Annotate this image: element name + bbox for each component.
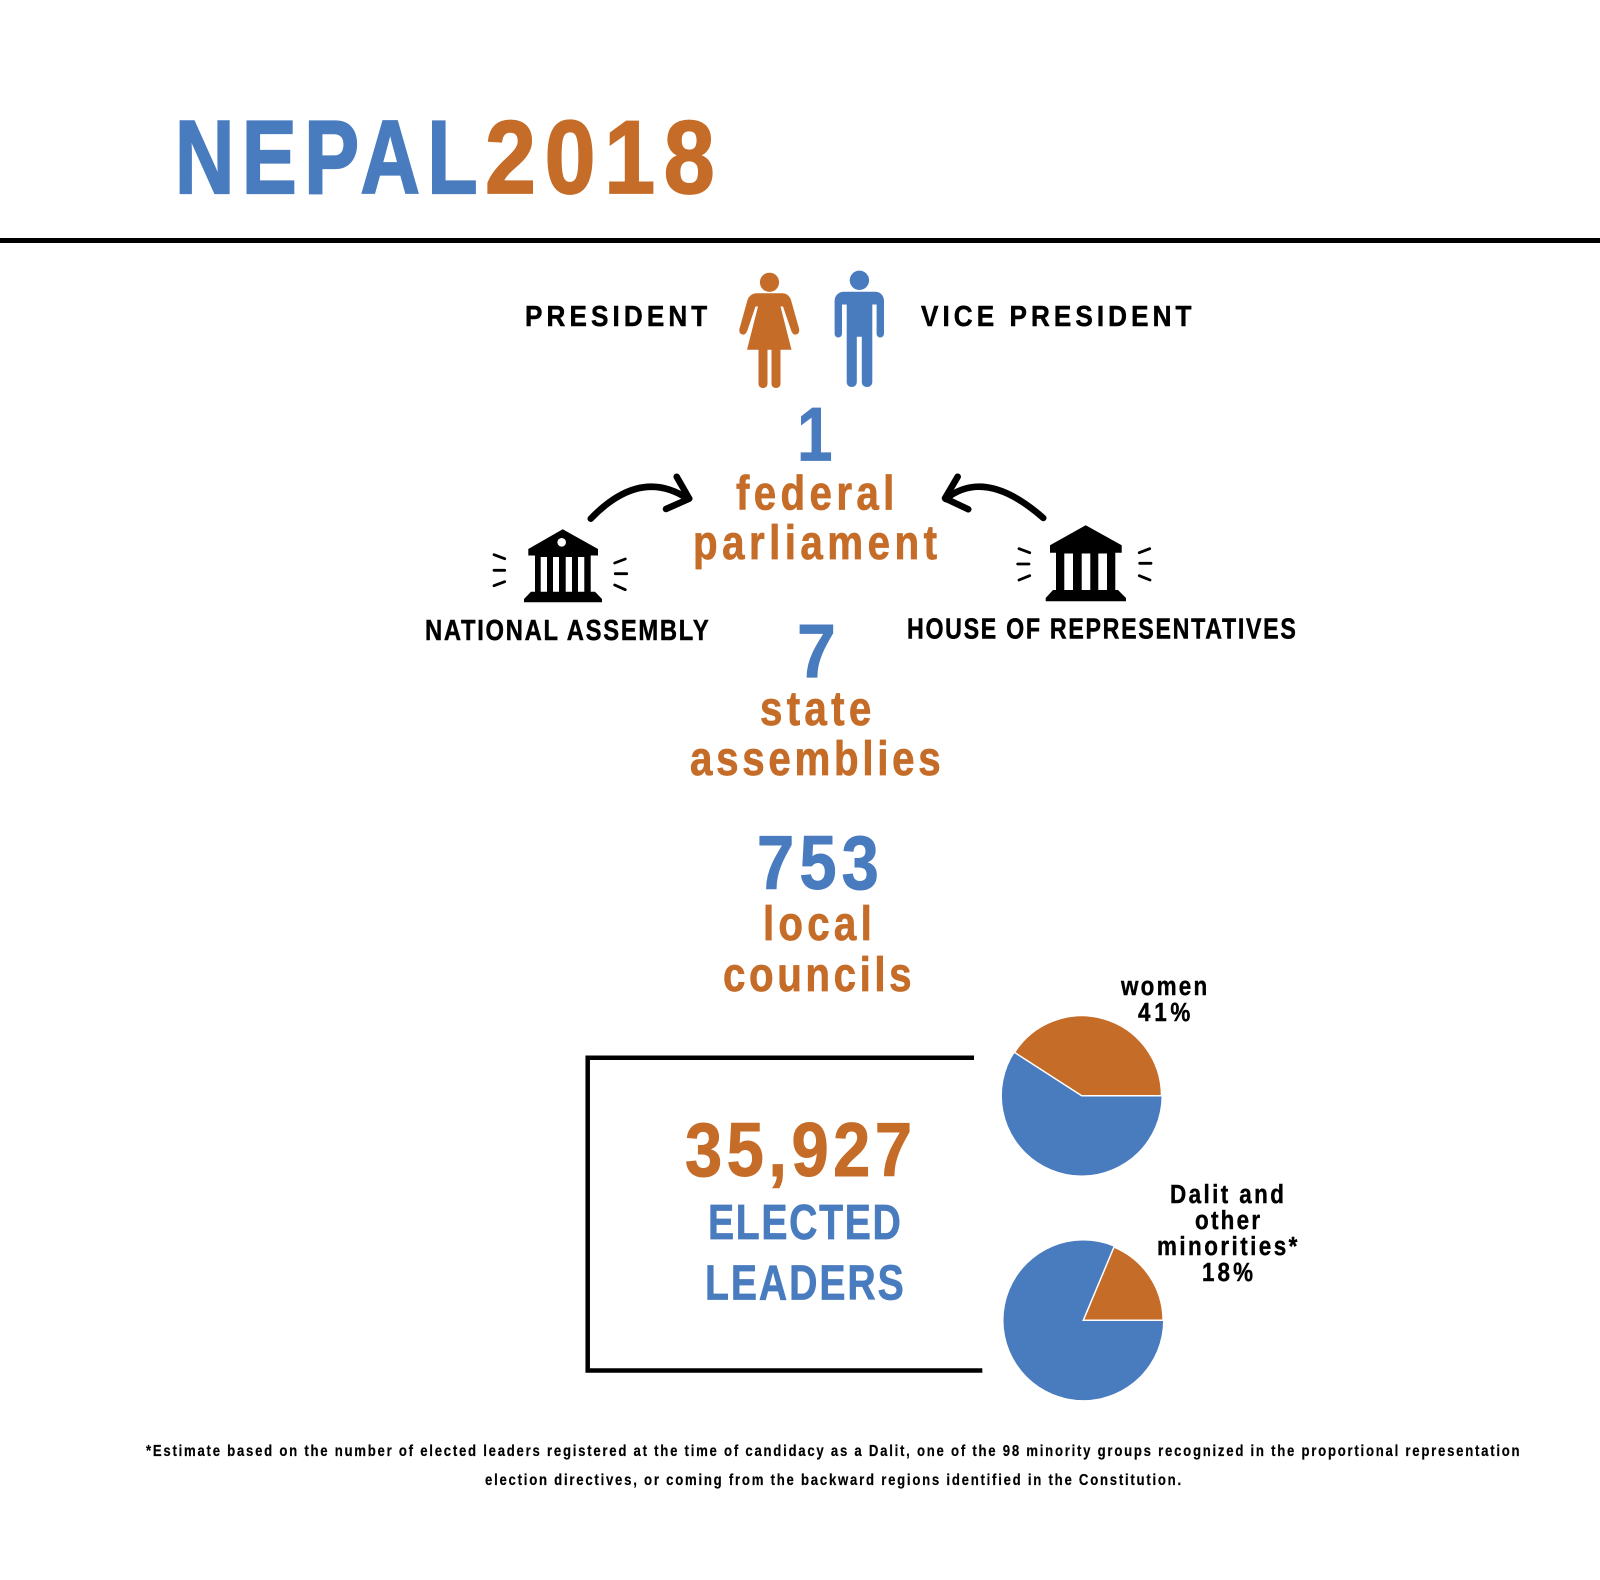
- stat: 35,927 elected leaders: [685, 1108, 912, 1310]
- stat: 1 federal parliament: federal: [736, 467, 894, 520]
- label: vice president: VICE PRESIDENT: [921, 300, 1192, 332]
- stat: 753 local councils: councils: [723, 949, 912, 1002]
- label: women 41%: women: [1120, 973, 1207, 1001]
- stat: 753 local councils: 753: [757, 821, 879, 906]
- stat: 7 state assemblies: [690, 610, 941, 786]
- label: dalit and other minorities 18%: Dalit and: [1170, 1181, 1284, 1209]
- arrow: house of representatives to parliament: [945, 477, 1043, 518]
- label: dalit and other minorities 18%: 18%: [1202, 1259, 1253, 1287]
- pie chart: women 41%: [1002, 1016, 1162, 1176]
- label: women 41%: [1120, 973, 1207, 1027]
- label: dalit and other minorities 18%: other: [1195, 1207, 1260, 1235]
- stat: 753 local councils: local: [763, 898, 872, 951]
- stat: 35,927 elected leaders: 35,927: [685, 1108, 912, 1193]
- label: dalit and other minorities 18%: [1157, 1181, 1298, 1287]
- stat: 7 state assemblies: 7: [797, 610, 836, 694]
- stat: 1 federal parliament: [693, 391, 937, 570]
- arrow: national assembly to parliament: [591, 477, 689, 519]
- icon: woman: [739, 273, 799, 388]
- icon: house of representatives building: [1018, 525, 1151, 601]
- label: women 41%: 41%: [1138, 999, 1190, 1027]
- stat: 1 federal parliament: 1: [797, 391, 833, 477]
- icon: man: [835, 271, 884, 387]
- stat: 7 state assemblies: state: [760, 683, 871, 736]
- label: dalit and other minorities 18%: minorities*: [1157, 1233, 1298, 1261]
- label: president: PRESIDENT: [525, 300, 707, 332]
- stat: 1 federal parliament: parliament: [693, 517, 937, 570]
- label: national assembly: NATIONAL ASSEMBLY: [425, 614, 709, 647]
- footnote: *Estimate based on the number of elected leaders registered at the time of candidacy as a Dalit, one of the 98 minority groups recognized in the proportional representation: [146, 1443, 1520, 1461]
- stat: 753 local councils: [723, 821, 912, 1002]
- stat: 35,927 elected leaders: LEADERS: [705, 1256, 904, 1310]
- bracket: [588, 1058, 982, 1370]
- stat: 7 state assemblies: assemblies: [690, 733, 941, 786]
- title: 2018: [485, 99, 715, 215]
- title: [175, 99, 715, 215]
- stat: 35,927 elected leaders: ELECTED: [708, 1196, 901, 1250]
- footnote: [146, 1443, 1520, 1489]
- label: house of representatives: HOUSE OF REPRESENTATIVES: [907, 612, 1296, 645]
- icon: national assembly building: [494, 529, 627, 602]
- title: NEPAL: [175, 99, 478, 215]
- pie chart: minorities 18%: [1004, 1240, 1163, 1400]
- footnote: election directives, or coming from the backward regions identified in the Constitution.: [485, 1472, 1181, 1489]
